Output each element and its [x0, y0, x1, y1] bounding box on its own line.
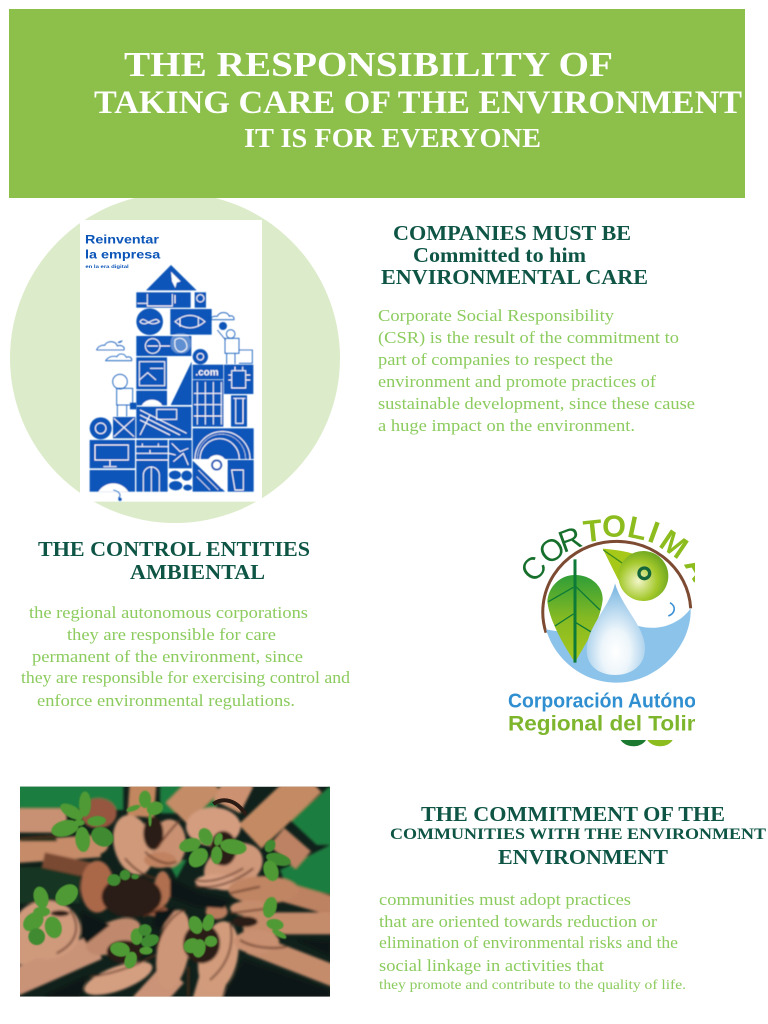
- soil: [51, 817, 258, 963]
- text block: regional corporations: the regional autonomous corporations: [29, 603, 308, 622]
- text block: corporate social responsibility: [378, 306, 695, 435]
- title line 3: IT IS FOR EVERYONE: [244, 123, 541, 153]
- heading: commitment of communities: ENVIRONMENT: [498, 845, 668, 869]
- text block: corporate social responsibility: part of companies to respect the: [378, 350, 613, 369]
- building details: [98, 272, 227, 492]
- book title: la empresa: [85, 248, 161, 262]
- book title: [85, 233, 161, 269]
- arms and hands: [20, 786, 330, 997]
- photo: hands holding seedlings: [20, 786, 330, 997]
- logo caption: Corporación Autónoma: [508, 689, 724, 712]
- book title: Reinventar: [85, 233, 159, 247]
- text block: communities: that are oriented towards reduction or: [379, 912, 657, 931]
- green shirts: [17, 783, 333, 903]
- heading: companies: ENVIRONMENTAL CARE: [381, 265, 648, 289]
- heading: commitment of communities: [390, 802, 766, 869]
- text block: regional corporations: they are responsible for exercising control and: [21, 668, 351, 687]
- title banner: [9, 9, 745, 198]
- book cover image: Reinventar la empresa: [80, 220, 262, 502]
- logo lettering: L: [625, 510, 650, 547]
- logo: Cortolima: [508, 515, 695, 746]
- building illustration: [90, 265, 254, 492]
- logo caption: Regional del Tolima: [508, 711, 719, 735]
- heading: commitment of communities: THE COMMITMENT OF THE: [421, 802, 725, 826]
- text block: regional corporations: [21, 603, 351, 710]
- finger creases: [20, 820, 287, 997]
- text block: corporate social responsibility: (CSR) is the result of the commitment to: [378, 328, 679, 347]
- text block: regional corporations: enforce environmental regulations.: [37, 691, 295, 710]
- text block: communities: communities must adopt practices: [379, 890, 631, 909]
- logo lettering: C: [514, 549, 554, 588]
- clouds and figures: [97, 313, 252, 501]
- logo lettering: [522, 515, 695, 583]
- heading: control entities: AMBIENTAL: [130, 560, 265, 584]
- logo caption: [508, 692, 695, 735]
- dark gaps: [20, 837, 330, 997]
- heading: companies: COMPANIES MUST BE: [393, 221, 631, 245]
- logo emblem: [543, 541, 691, 683]
- text block: communities: social linkage in activities that: [379, 956, 604, 975]
- text block: communities: [379, 890, 686, 993]
- seedlings: [19, 791, 292, 970]
- logo lettering: A: [677, 551, 718, 587]
- logo lettering: O: [601, 509, 626, 544]
- text block: corporate social responsibility: Corporate Social Responsibility: [378, 306, 615, 325]
- title line 1: THE RESPONSIBILITY OF: [124, 45, 613, 84]
- title line 2: TAKING CARE OF THE ENVIRONMENT: [94, 85, 742, 121]
- logo lettering: O: [533, 530, 571, 571]
- text block: corporate social responsibility: environment and promote practices of: [378, 372, 656, 391]
- text block: corporate social responsibility: a huge impact on the environment.: [378, 416, 635, 435]
- heading: control entities: THE CONTROL ENTITIES: [38, 537, 310, 561]
- heading: companies: [381, 221, 648, 289]
- text block: regional corporations: permanent of the environment, since: [32, 647, 303, 666]
- background circle: [10, 193, 340, 523]
- text block: communities: they promote and contribute to the quality of life.: [379, 978, 686, 993]
- logo lettering: T: [582, 513, 604, 549]
- logo lettering: R: [554, 520, 586, 560]
- text block: regional corporations: they are responsible for care: [67, 625, 276, 644]
- logo lettering: M: [654, 523, 694, 566]
- heading: commitment of communities: COMMUNITIES WITH THE ENVIRONMENT: [390, 826, 766, 843]
- text block: communities: elimination of environmental risks and the: [379, 933, 678, 952]
- logo lettering: I: [644, 515, 664, 550]
- heading: control entities: [38, 537, 310, 584]
- bracelet: [213, 800, 246, 815]
- building details: .com: [195, 368, 219, 379]
- text block: corporate social responsibility: sustainable development, since these cause: [378, 394, 695, 413]
- heading: companies: Committed to him: [413, 243, 587, 267]
- book title: en la era digital: [85, 264, 129, 269]
